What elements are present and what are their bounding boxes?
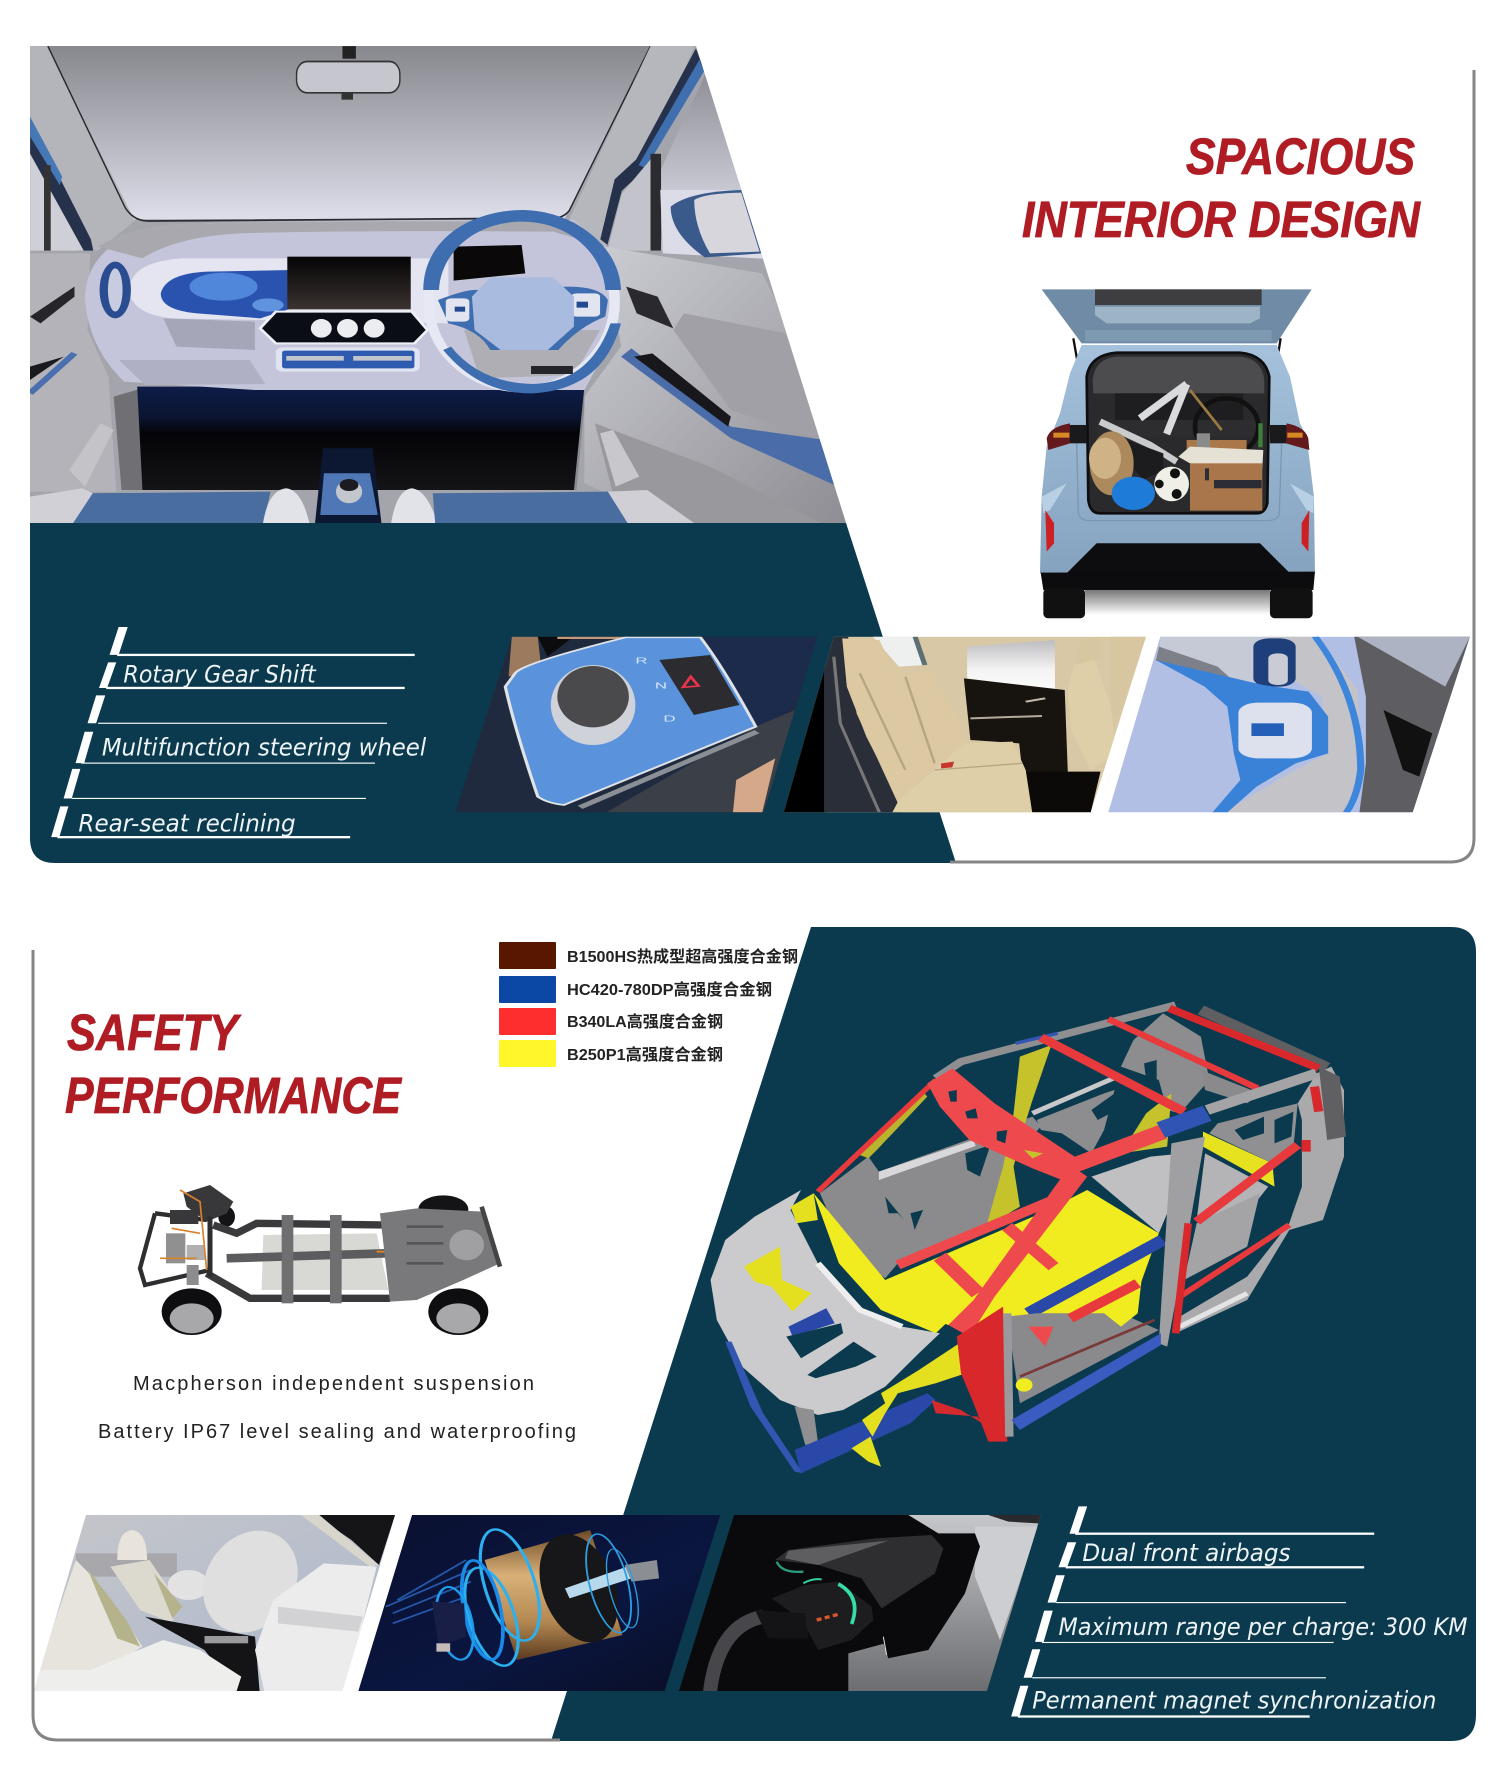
text: suspension and battery: Battery IP67 level sealing and waterproofing bbox=[98, 1421, 576, 1443]
legend: steel grades bbox=[499, 942, 798, 1067]
title: safety performance: SAFETY bbox=[67, 1004, 241, 1061]
panel: interior design background bbox=[30, 70, 1474, 863]
front end structure bbox=[711, 1190, 940, 1415]
feature list: interior: Rotary Gear Shift bbox=[123, 662, 317, 689]
title: safety performance: PERFORMANCE bbox=[65, 1067, 403, 1124]
feature list: safety: Permanent magnet synchronization bbox=[1032, 1688, 1436, 1715]
photo: charging port bbox=[675, 1515, 1042, 1692]
photo: open trunk of blue car bbox=[1040, 289, 1315, 618]
title: spacious interior design: SPACIOUS bbox=[1186, 128, 1415, 185]
feature list: interior: Multifunction steering wheel bbox=[102, 735, 427, 762]
far side frame bbox=[818, 1013, 1260, 1278]
legend: steel grades: B1500HS热成型超高强度合金钢 bbox=[567, 947, 798, 966]
feature list: safety bbox=[1011, 1506, 1467, 1718]
text: suspension and battery: Macpherson independent suspension bbox=[133, 1373, 534, 1395]
title: spacious interior design: INTERIOR DESIGN bbox=[1022, 191, 1421, 248]
feature list: safety: Dual front airbags bbox=[1082, 1540, 1291, 1568]
near side door opening bbox=[1007, 1277, 1159, 1403]
lower front rail bbox=[725, 1337, 982, 1473]
panel: safety performance background bbox=[33, 927, 1476, 1741]
illustration: vehicle chassis bbox=[140, 1185, 500, 1335]
feature list: safety: Maximum range per charge: 300 KM bbox=[1059, 1614, 1467, 1642]
legend: steel grades: HC420-780DP高强度合金钢 bbox=[567, 980, 772, 999]
roof bows and rails bbox=[927, 1005, 1327, 1180]
rear quarter bbox=[1176, 1067, 1346, 1333]
title: spacious interior design bbox=[1022, 128, 1421, 248]
photo: rotary gear shift: N bbox=[655, 681, 667, 690]
legend: steel grades: B340LA高强度合金钢 bbox=[567, 1012, 723, 1031]
legend: steel grades: B250P1高强度合金钢 bbox=[567, 1045, 723, 1064]
photo: electric motor bbox=[356, 1515, 723, 1692]
text: suspension and battery bbox=[98, 1373, 576, 1443]
dashboard, doors, footwell and seats bbox=[30, 190, 850, 525]
photo: dashboard interior bbox=[30, 46, 850, 526]
near side pillars and sill bbox=[948, 1113, 1207, 1442]
photo: multifunction steering wheel bbox=[1104, 637, 1471, 813]
floor and cowl bbox=[814, 1132, 1275, 1333]
illustration: body-in-white steel structure bbox=[711, 1005, 1346, 1473]
windshield and upper pillars bbox=[30, 46, 765, 251]
photo: airbags bbox=[32, 1515, 397, 1692]
photo: rotary gear shift: R bbox=[635, 656, 648, 665]
feature list: interior: Rear-seat reclining bbox=[78, 811, 296, 838]
title: safety performance bbox=[65, 1004, 403, 1124]
feature list: interior bbox=[51, 627, 427, 838]
photo: rotary gear shift: D bbox=[663, 714, 676, 724]
photo: rotary gear shift bbox=[450, 637, 821, 813]
photo: rear seats bbox=[782, 637, 1149, 813]
